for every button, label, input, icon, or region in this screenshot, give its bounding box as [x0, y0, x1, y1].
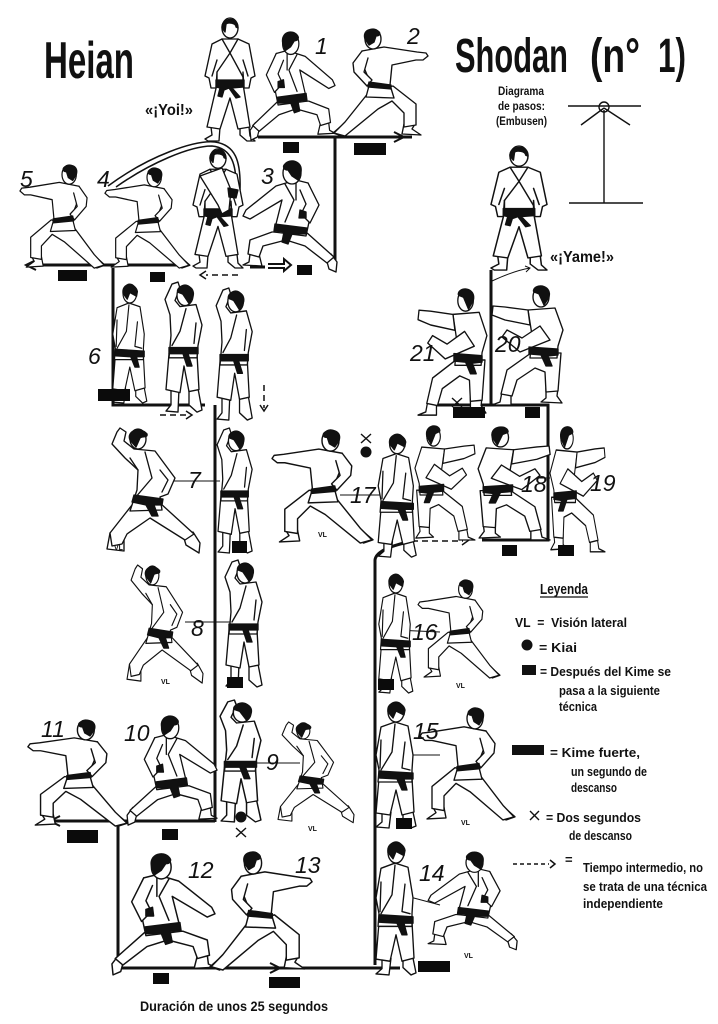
- legend: short kime: [522, 664, 671, 714]
- figure: 17: [378, 434, 416, 557]
- step numbers: 18: [521, 471, 547, 497]
- figure: 19: [550, 427, 605, 552]
- step numbers: 13: [295, 852, 321, 878]
- step numbers: 17: [350, 482, 377, 508]
- step numbers: 16: [412, 619, 438, 645]
- figure: 6 raised block: [216, 288, 252, 420]
- figure: 16 lateral: [418, 580, 500, 678]
- curved yame arrow: [492, 266, 530, 281]
- step numbers: [20, 23, 616, 886]
- figure: 14: [376, 842, 416, 975]
- figure: yoi: [205, 18, 255, 141]
- curved double arc: [108, 142, 240, 192]
- legend heading: Leyenda: [540, 581, 589, 598]
- title: Shodan (n° 1): (n°: [590, 30, 640, 83]
- figure: 13: [210, 852, 312, 970]
- figure: yame: [491, 146, 547, 270]
- legend: strong kime: descanso: [571, 780, 617, 795]
- figure: 6 side: [113, 284, 147, 403]
- path lines of the kata: [30, 137, 548, 968]
- step numbers: 10: [124, 720, 150, 746]
- step numbers: 6: [88, 343, 101, 369]
- figure: 10: [127, 716, 217, 825]
- legend: VL: VL = Visión lateral: [515, 615, 627, 630]
- VL tags: VL: [114, 545, 124, 552]
- step numbers: 4: [97, 166, 110, 192]
- figure: 12: [112, 854, 215, 975]
- figure: 4: [105, 168, 190, 268]
- VL tags: VL: [308, 826, 318, 833]
- legend: short kime: técnica: [559, 699, 598, 714]
- figure: 20: [492, 286, 563, 405]
- VL tags: VL: [318, 532, 328, 539]
- labels: yoi and yame: [145, 102, 614, 266]
- figure: 17 turning: [415, 426, 475, 540]
- figure: 11: [28, 720, 128, 826]
- legend: short kime: pasa a la siguiente: [559, 683, 660, 698]
- figure: 7: [217, 428, 252, 553]
- figure: 1: [250, 32, 335, 140]
- legend: [512, 581, 708, 911]
- figure: 8: [225, 560, 262, 687]
- figure: 17 lateral: [272, 430, 373, 543]
- figure: 6 raise: [165, 282, 202, 412]
- kime markers: [58, 142, 574, 988]
- title: Heian: Heian: [44, 32, 134, 90]
- step numbers: 12: [188, 857, 214, 883]
- labels: yoi and yame: «¡Yame!»: [550, 249, 614, 266]
- diagram: embusen: [568, 102, 643, 203]
- text: Diagrama de pasos: Diagrama: [498, 84, 544, 98]
- text: Diagrama de pasos: de pasos:: [498, 99, 545, 113]
- legend: strong kime: un segundo de: [571, 764, 647, 779]
- figure: 2: [333, 29, 428, 136]
- connector lines between views: [170, 478, 550, 905]
- title: Shodan (n° 1): Shodan: [455, 30, 568, 83]
- VL tags: VL: [464, 953, 474, 960]
- legend: strong kime: [512, 745, 647, 795]
- figure: 8 lateral: [127, 565, 203, 683]
- figure: 3: [243, 161, 337, 272]
- legend: short kime: = Después del Kime se: [540, 664, 671, 679]
- step numbers: 8: [191, 615, 204, 641]
- figure: 9 lateral: [278, 722, 354, 823]
- step numbers: 21: [409, 340, 436, 366]
- figure: 18: [478, 427, 550, 540]
- VL tags: [114, 532, 474, 960]
- figure: 21: [418, 289, 487, 415]
- figure: 15: [376, 702, 416, 828]
- figure: 9: [220, 700, 261, 822]
- legend: intermediate time: [513, 852, 708, 911]
- legend: two second rest: [530, 810, 641, 843]
- step numbers: 5: [20, 166, 33, 192]
- dashed arrows: [160, 271, 469, 545]
- VL tags: VL: [461, 820, 471, 827]
- legend: kiai: = Kiai: [539, 640, 577, 655]
- legend: strong kime: = Kime fuerte,: [550, 745, 640, 760]
- kiai and rest marks: [236, 398, 462, 837]
- step numbers: 19: [590, 470, 616, 496]
- VL tags: VL: [161, 679, 171, 686]
- legend: intermediate time: independiente: [583, 896, 663, 911]
- step numbers: 15: [413, 718, 439, 744]
- VL tags: VL: [456, 683, 466, 690]
- step numbers: 7: [188, 467, 202, 493]
- figure: 14 lateral: [428, 852, 517, 950]
- arrowheads on the path: [26, 132, 404, 973]
- step numbers: 2: [406, 23, 420, 49]
- legend: intermediate time: Tiempo intermedio, no: [583, 860, 703, 875]
- text: Diagrama de pasos: [496, 84, 547, 128]
- legend: two second rest: = Dos segundos: [546, 810, 641, 825]
- step numbers: 14: [419, 860, 445, 886]
- step numbers: 11: [41, 716, 65, 742]
- text: Diagrama de pasos: (Embusen): [496, 114, 547, 128]
- step numbers: 1: [315, 33, 328, 59]
- legend: two second rest: de descanso: [569, 828, 632, 843]
- step numbers: 9: [266, 749, 279, 775]
- figure: 7 lateral: [107, 428, 200, 553]
- figure: intermediate twist: [193, 149, 243, 268]
- step numbers: 20: [494, 331, 521, 357]
- labels: yoi and yame: «¡Yoi!»: [145, 102, 193, 119]
- figure: 16: [379, 574, 413, 693]
- title: Shodan (n° 1): 1): [658, 30, 686, 83]
- legend: intermediate time: =: [565, 852, 573, 867]
- legend: kiai: [522, 640, 577, 655]
- footer: duration: Duración de unos 25 segundos: [140, 998, 328, 1014]
- step numbers: 3: [261, 163, 274, 189]
- figure: 5: [20, 165, 105, 268]
- figure: 15 lateral: [420, 708, 515, 820]
